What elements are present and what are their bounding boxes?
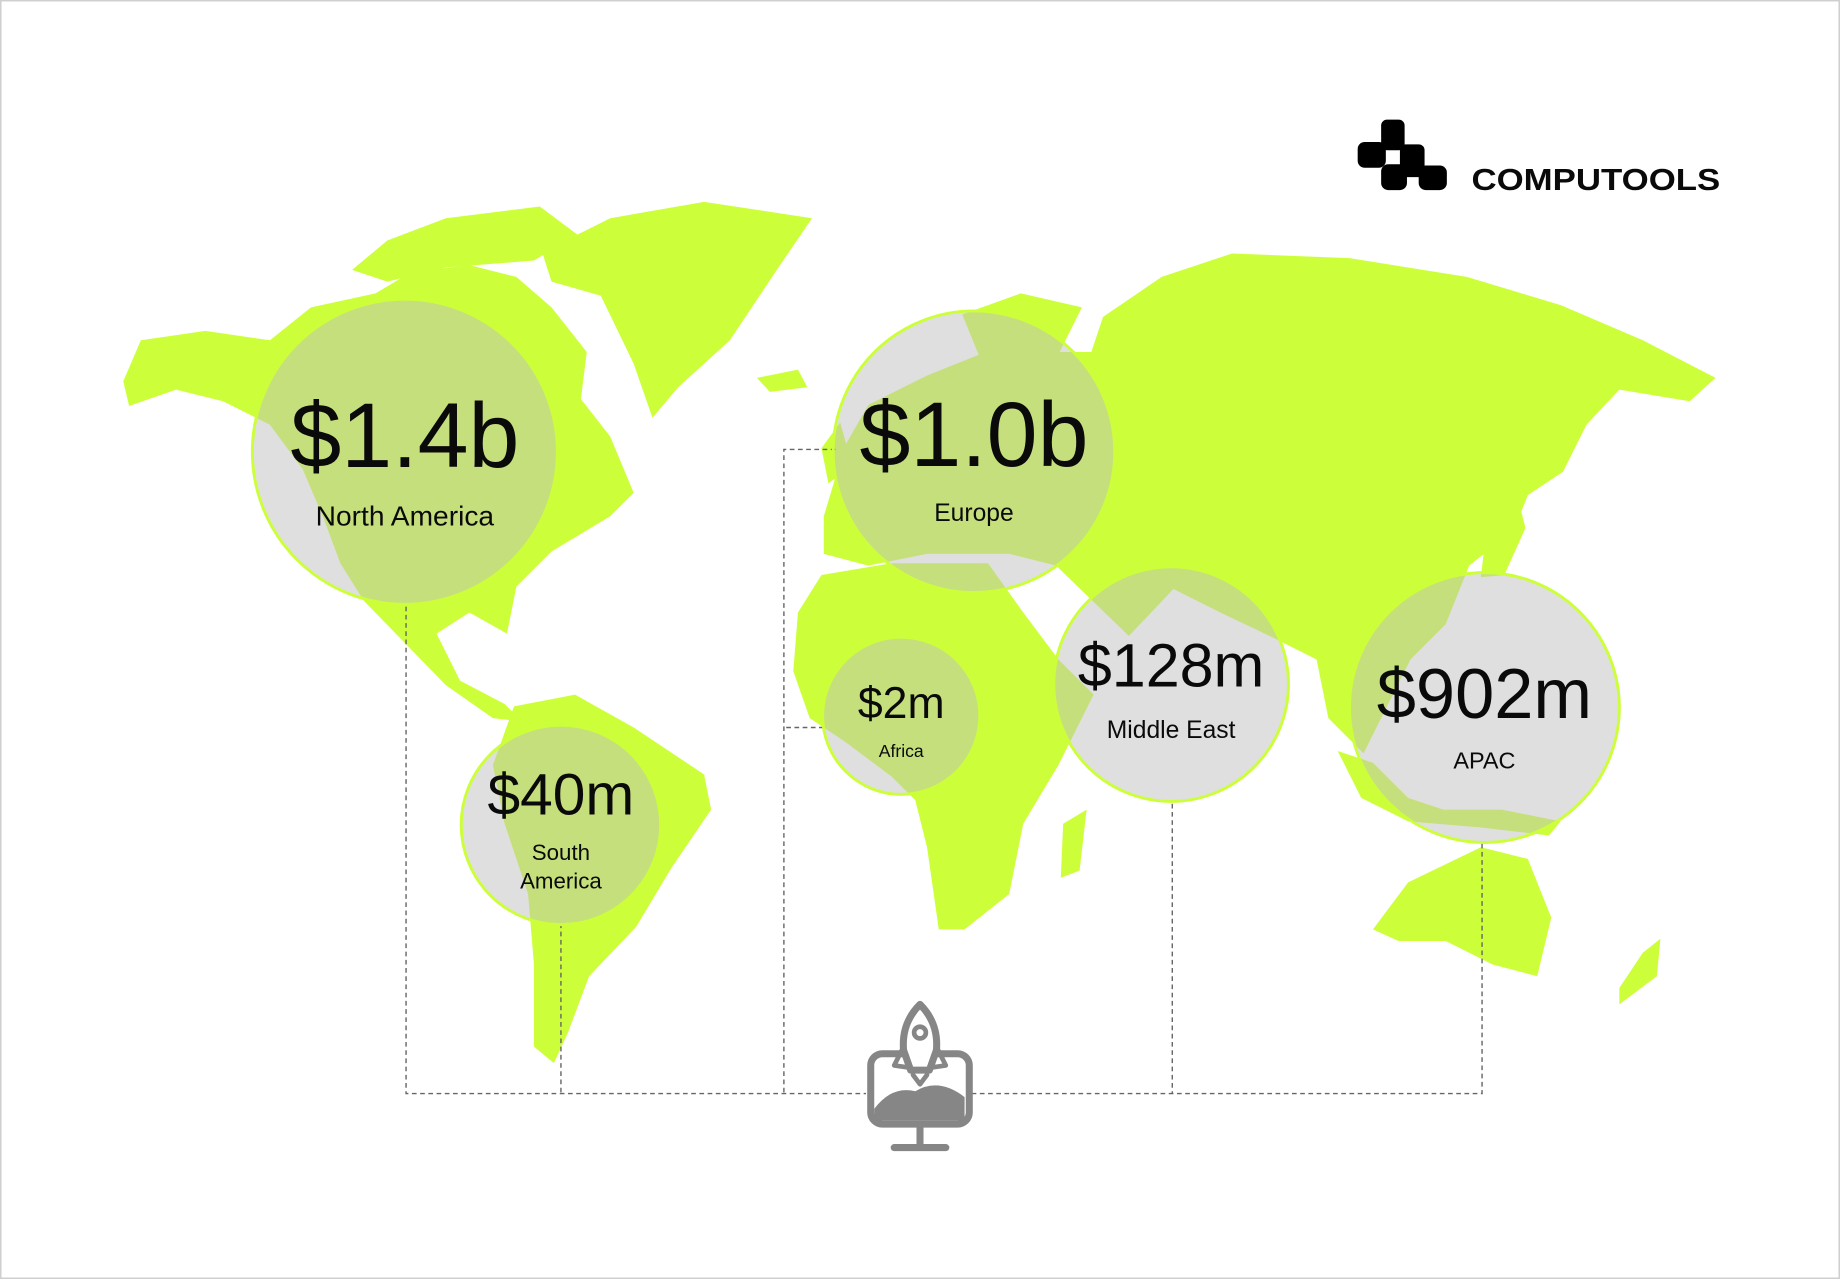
continent: south america (493, 695, 711, 1063)
continent: uk (821, 422, 852, 483)
circle: north america (252, 299, 557, 604)
continent: arctic islands (352, 207, 577, 282)
circle: europe: Europe (934, 500, 1014, 527)
circle: africa: Africa (879, 741, 924, 761)
continent: indonesia (1338, 751, 1561, 835)
circle: apac (1349, 573, 1619, 842)
circle: south america: South (532, 840, 590, 865)
logo: computools: COMPUTOOLS (1471, 163, 1720, 197)
circle: middle east: Middle East (1107, 717, 1236, 744)
continent: greenland (542, 202, 812, 418)
continent: japan (1481, 463, 1525, 577)
continent: australia (1373, 847, 1551, 976)
circle: africa: $2m (858, 679, 945, 728)
world map (123, 202, 1716, 1063)
icon: rocket launch monitor (871, 1004, 969, 1148)
circle: south america: America (520, 868, 602, 893)
circle: middle east (1054, 567, 1288, 801)
continent: scandinavia (962, 293, 1082, 390)
circle: africa (823, 637, 980, 794)
circle: apac: APAC (1453, 748, 1516, 774)
circle: north america: $1.4b (290, 385, 519, 487)
logo: computools (1358, 120, 1720, 197)
continent: new zealand (1619, 939, 1660, 1004)
circle: europe: $1.0b (859, 384, 1088, 486)
continent: madagascar (1061, 810, 1087, 878)
circle: south america: $40m (488, 762, 634, 827)
continent: eurasia (824, 253, 1716, 753)
circle: middle east: $128m (1078, 631, 1264, 699)
connector lines (406, 449, 1482, 1094)
continent: north america (123, 265, 634, 722)
circle: north america: North America (316, 501, 494, 532)
continent: iceland (757, 370, 807, 392)
circle: apac: $902m (1377, 654, 1592, 733)
circle: south america (461, 725, 661, 925)
continent: africa (793, 563, 1094, 929)
circle: europe (833, 311, 1115, 593)
